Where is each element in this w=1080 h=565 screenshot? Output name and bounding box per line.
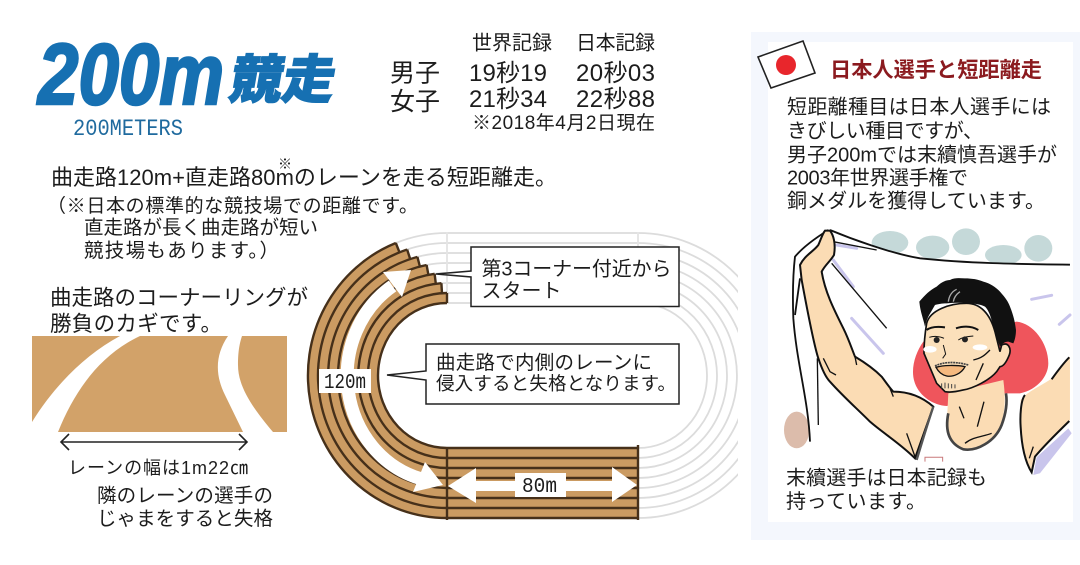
- panel: Japanese sprinters: [751, 32, 1080, 540]
- description text: 競技場もあります。）: [84, 240, 279, 262]
- raised arm: [800, 231, 933, 458]
- panel body text: きびしい種目ですが、: [787, 120, 983, 142]
- panel body text: 短距離種目は日本人選手には: [787, 96, 1051, 118]
- panel body text: 2003年世界選手権で: [787, 166, 968, 190]
- label: 120m: 120m: [324, 372, 366, 395]
- records table: 20秒03: [576, 60, 655, 87]
- cornering heading: 勝負のカギです。: [50, 312, 222, 336]
- records table: 日本記録: [576, 32, 655, 55]
- illustration: athlete with towel: [784, 228, 1072, 475]
- callout: start: スタート: [482, 280, 562, 302]
- arrow: lane width: [61, 434, 247, 450]
- panel body text: 銅メダルを獲得しています。: [787, 190, 1045, 212]
- lane width text: レーンの幅は1m22㎝: [68, 458, 248, 478]
- description text: [47, 156, 557, 262]
- lane width text: 隣のレーンの選手の: [97, 485, 273, 507]
- description text: 曲走路120m+直走路80mのレーンを走る短距離走。: [51, 165, 557, 190]
- panel body text: 男子200mでは末續慎吾選手が: [787, 144, 1057, 166]
- brown straight: [447, 448, 638, 518]
- label: 80m: 80m: [522, 476, 557, 499]
- title: 200m競走: [36, 27, 340, 142]
- callout: disqualification: [387, 344, 679, 404]
- records table: 世界記録: [472, 32, 552, 55]
- records table: 女子: [390, 88, 440, 116]
- track diagram: [308, 232, 777, 520]
- cornering heading: [50, 286, 308, 336]
- neck: [947, 380, 1005, 449]
- cornering heading: 曲走路のコーナーリングが: [50, 286, 308, 310]
- arrow: curve: [347, 270, 443, 492]
- caption text: 持っています。: [786, 490, 926, 513]
- callout: start: [436, 247, 679, 306]
- hair: [919, 278, 1016, 347]
- title: 200m競走: 200m: [36, 27, 224, 123]
- callout: disqualification: 曲走路で内側のレーンに: [436, 352, 652, 374]
- lane width text: [68, 458, 273, 530]
- grey full track: [396, 232, 738, 519]
- records table: 22秒88: [576, 86, 655, 113]
- panel heading: 日本人選手と短距離走: [830, 58, 1042, 82]
- shirt strap: [917, 407, 933, 460]
- face: [924, 303, 1010, 392]
- callout: start: 第3コーナー付近から: [482, 258, 672, 280]
- records table: ※2018年4月2日現在: [472, 112, 655, 134]
- description text: ※: [278, 156, 292, 172]
- lane width text: じゃまをすると失格: [97, 508, 273, 530]
- callout: disqualification: 侵入すると失格となります。: [436, 373, 676, 394]
- description text: （※日本の標準的な競技場での距離です。: [47, 195, 418, 217]
- arrow: straight: [448, 467, 637, 503]
- lane lines: [308, 243, 638, 520]
- lane close-up panel: [32, 336, 287, 432]
- records table: 男子: [390, 60, 440, 88]
- caption text: [786, 466, 987, 513]
- caption text: 末續選手は日本記録も: [786, 466, 987, 490]
- title: 200m競走: 200METERS: [73, 116, 183, 142]
- right arm: [1021, 357, 1070, 472]
- title: 200m競走: 競走: [226, 52, 340, 110]
- brown curve lanes: [313, 248, 448, 513]
- icon: Japanese flag: [758, 41, 815, 88]
- label: 80m: [515, 473, 566, 499]
- facial features: [927, 327, 990, 388]
- description text: 直走路が長く曲走路が短い: [84, 217, 318, 239]
- panel body text: [787, 96, 1057, 212]
- records table: 19秒19: [469, 60, 547, 87]
- records table: [390, 32, 655, 134]
- records table: 21秒34: [469, 86, 547, 113]
